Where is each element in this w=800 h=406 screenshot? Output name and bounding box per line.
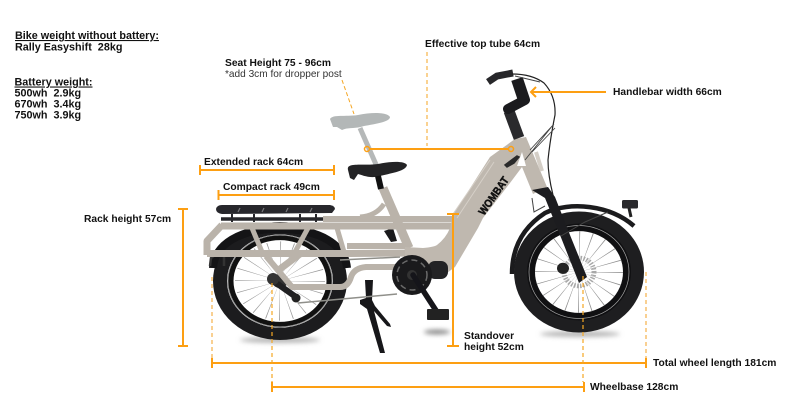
- dimension: rack height: [84, 209, 188, 346]
- black shifter under rail: [384, 228, 397, 242]
- stem and handlebar: [488, 73, 555, 195]
- dimension: wheelbase: Wheelbase 128cm: [590, 382, 678, 393]
- dimension: total wheel length: Total wheel length 181cm: [653, 358, 776, 369]
- text block: battery weight: 750wh 3.9kg: [14, 110, 81, 122]
- dimension: handlebar width: [531, 87, 722, 98]
- front fender: [512, 206, 634, 274]
- ghost raised seat: [330, 113, 390, 169]
- dimension: seat height: [225, 58, 354, 114]
- chain: [298, 257, 400, 303]
- dimension: effective top tube: Effective top tube 64cm: [425, 39, 540, 50]
- dimension: handlebar width: Handlebar width 66cm: [613, 87, 722, 98]
- rear fender bracket: [210, 255, 224, 266]
- rear fender: [213, 229, 347, 268]
- dimension: standover height: height 52cm: [464, 342, 524, 353]
- brand logo: WOMBAT: [477, 175, 512, 218]
- dimension: extended rack: Extended rack 64cm: [204, 157, 303, 168]
- motor and crank: [392, 255, 449, 320]
- text block: bike weight: Rally Easyshift 28kg: [15, 42, 122, 54]
- dimension: rack height: Rack height 57cm: [84, 214, 171, 225]
- fork: [532, 187, 608, 283]
- text block: battery weight: Battery weight:: [14, 76, 92, 88]
- rack: [216, 205, 335, 222]
- seat tube: [383, 188, 409, 248]
- headlight: [622, 200, 638, 217]
- dimension: wheelbase: [272, 276, 678, 393]
- derailleur: [272, 280, 296, 297]
- main frame: [405, 137, 547, 273]
- dimension: effective top tube: [364, 39, 540, 152]
- dimension: standover height: [447, 214, 524, 353]
- dimension: seat height: Seat Height 75 - 96cm: [225, 58, 331, 69]
- dimension: standover height: Standover: [464, 331, 514, 342]
- dimension: extended rack: [200, 157, 334, 175]
- text block: bike weight: [15, 30, 159, 54]
- frame: [207, 188, 452, 287]
- dimension: total wheel length: [212, 272, 776, 369]
- dimension: compact rack: [218, 182, 334, 200]
- text block: battery weight: 670wh 3.4kg: [14, 98, 81, 110]
- dimension: seat height: *add 3cm for dropper post: [225, 69, 342, 80]
- text block: battery weight: 500wh 2.9kg: [14, 88, 81, 100]
- text block: bike weight: Bike weight without battery:: [15, 30, 159, 42]
- dimension: compact rack: Compact rack 49cm: [223, 182, 320, 193]
- seat gusset: [360, 204, 384, 217]
- text block: battery weight: [14, 76, 92, 122]
- seat: [348, 162, 407, 189]
- chainstay: [266, 256, 397, 287]
- ground shadows: [240, 330, 620, 343]
- illustration: cargo e-bike: [207, 73, 638, 353]
- kickstand: [360, 280, 391, 353]
- rear cargo rails: [221, 222, 452, 230]
- rear wheel: [220, 228, 340, 334]
- front wheel: [521, 218, 637, 326]
